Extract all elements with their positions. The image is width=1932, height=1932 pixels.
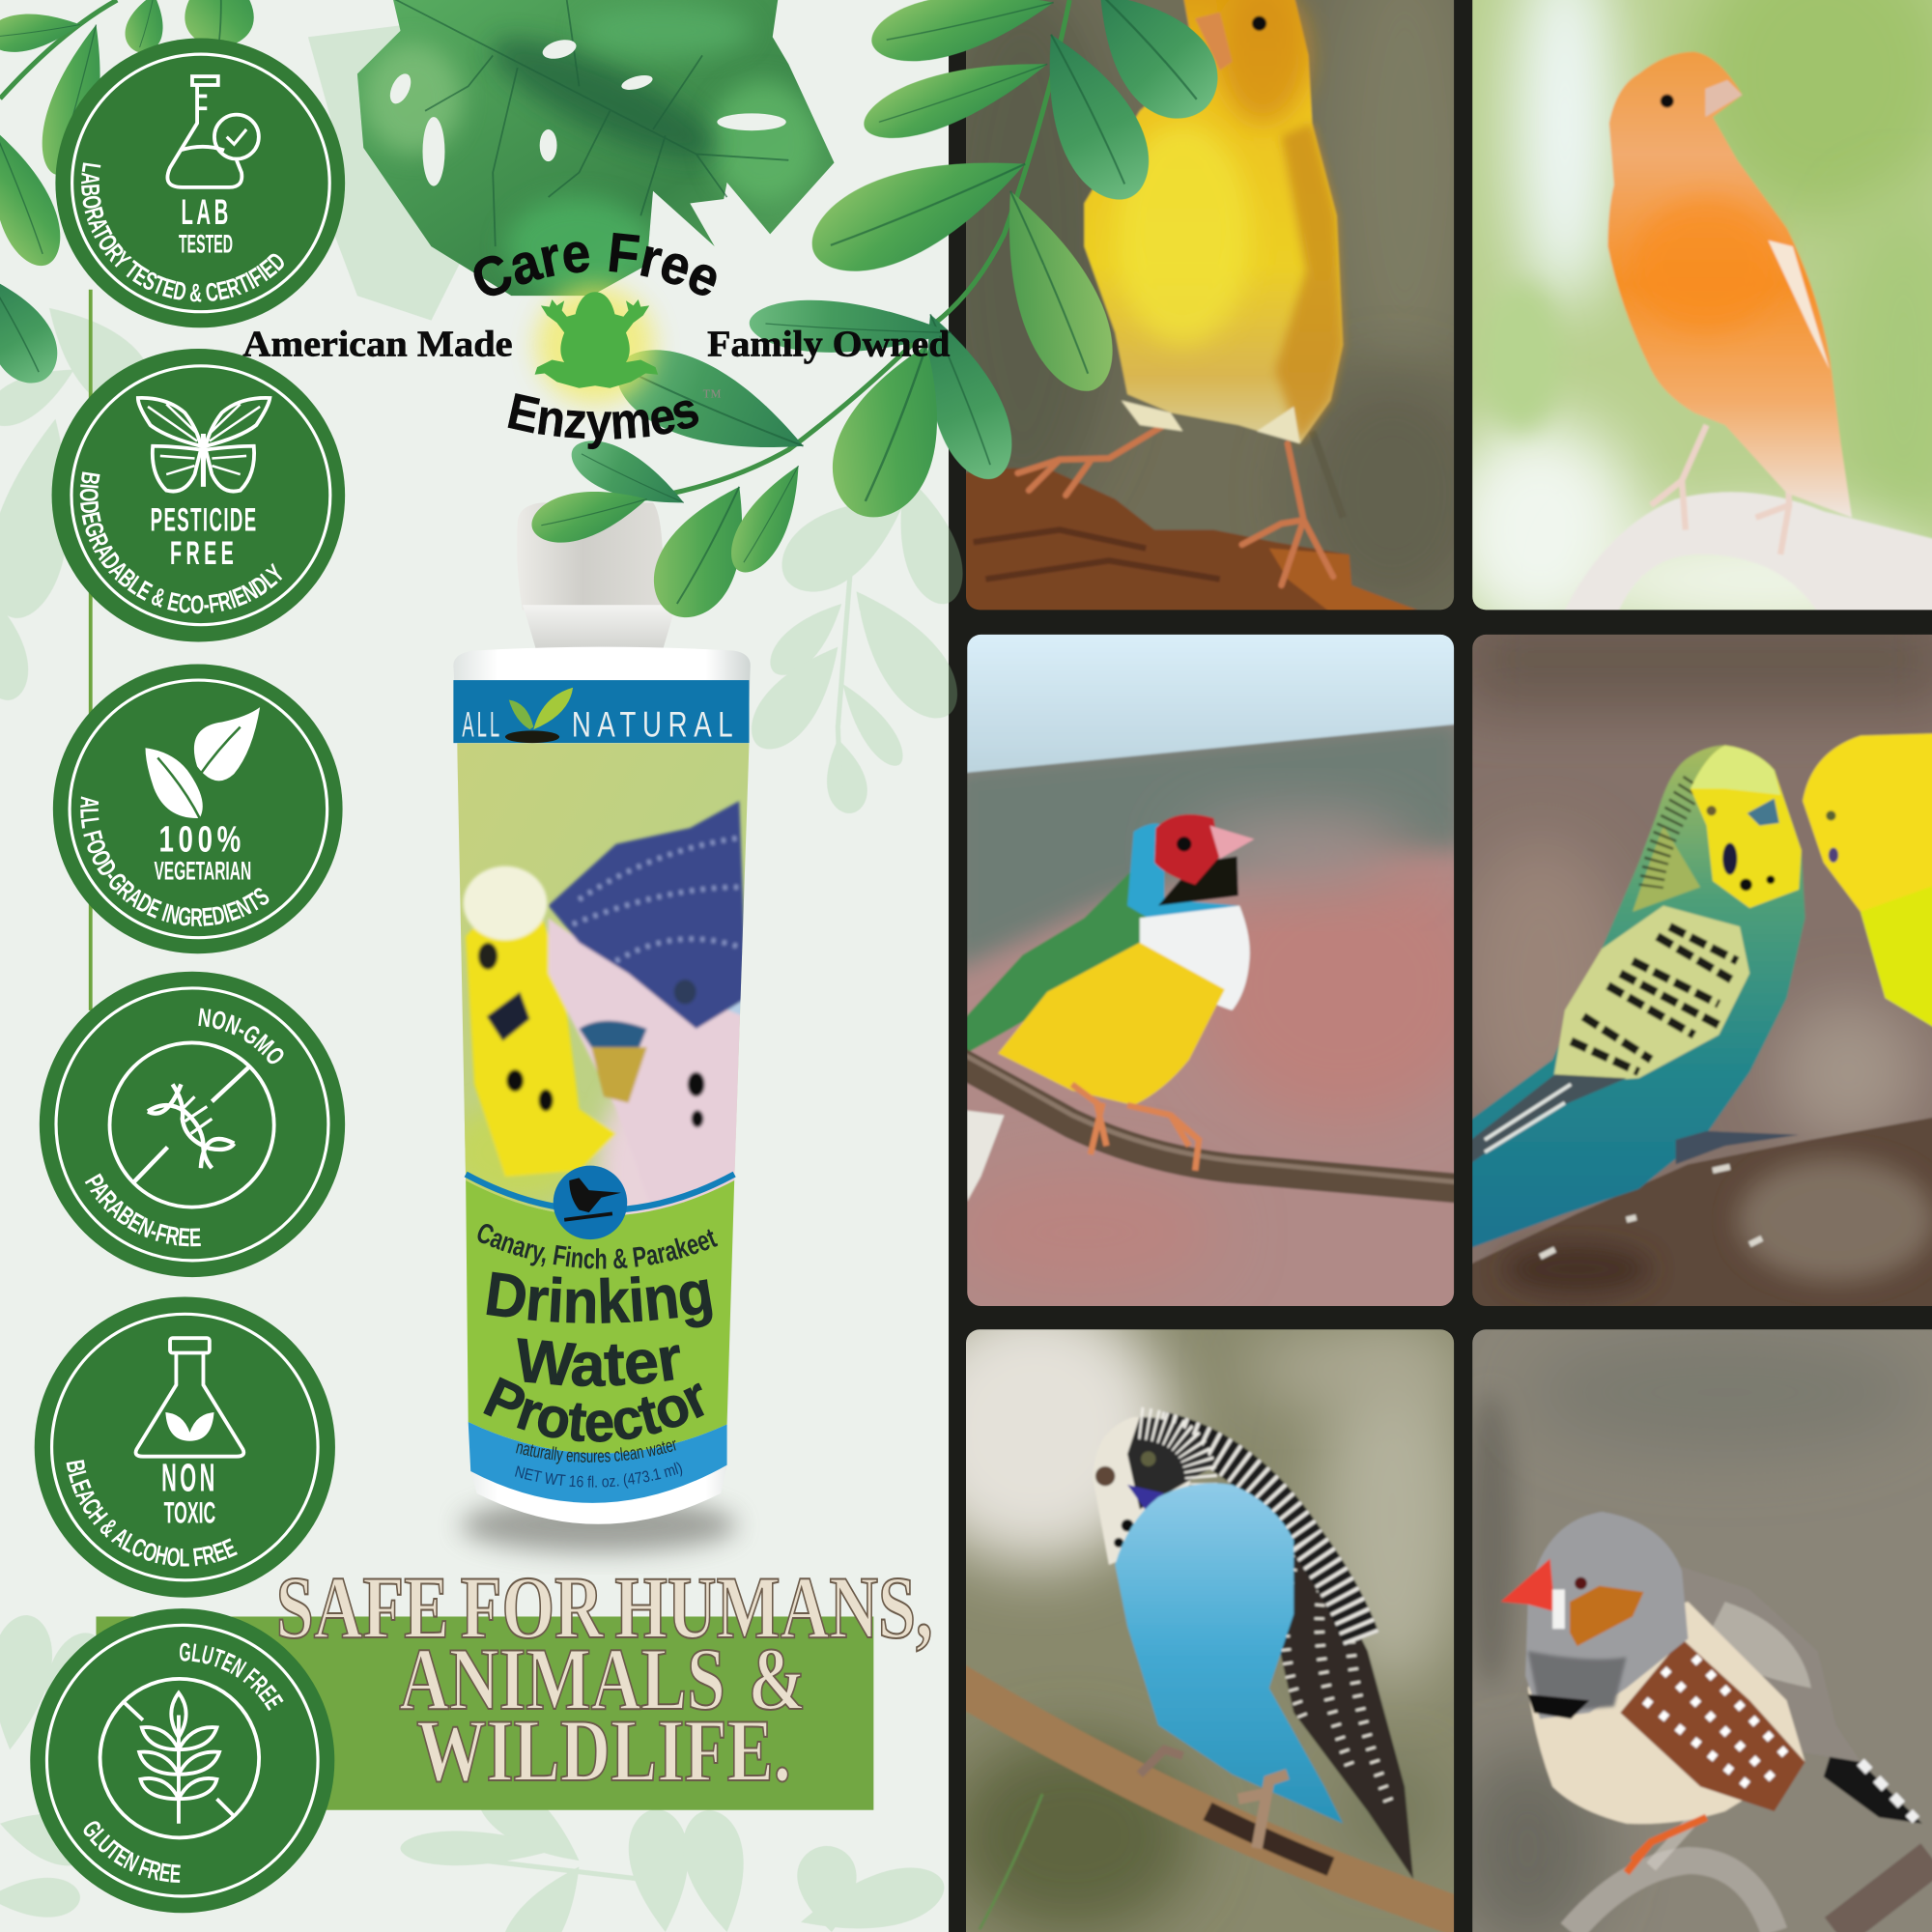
badge: pesticide free: PESTICIDE bbox=[151, 502, 258, 539]
photo: budgerigars bbox=[1454, 610, 1932, 1319]
badge: non toxic: NON bbox=[161, 1455, 218, 1499]
frog bbox=[535, 292, 658, 388]
headline: SAFE FOR HUMANS, bbox=[276, 1558, 933, 1657]
logo bbox=[473, 232, 722, 450]
label text: naturally ensures clean water bbox=[516, 1439, 676, 1464]
all natural: ALL bbox=[462, 705, 502, 745]
pale background leaves bbox=[0, 25, 974, 1932]
photo: orange canary bbox=[1472, 0, 1932, 611]
badge: non-gmo bbox=[40, 972, 345, 1277]
photo: gouldian finch bbox=[967, 634, 1455, 1306]
badge: lab tested: LAB bbox=[182, 192, 232, 232]
background panel bbox=[0, 0, 949, 1932]
label text: Drinking bbox=[487, 1271, 713, 1327]
label text: Canary, Finch & Parakeet bbox=[477, 1224, 719, 1269]
headline: WILDLIFE. bbox=[416, 1701, 791, 1800]
green banner bbox=[96, 1616, 873, 1810]
sprout icon bbox=[505, 688, 573, 743]
bottle body bbox=[453, 647, 751, 1524]
label text: Water bbox=[517, 1338, 680, 1387]
icon: flask with sprout bbox=[136, 1338, 243, 1457]
vertical green line bbox=[89, 290, 93, 1010]
icon: crossed dna bbox=[134, 1067, 248, 1181]
badge: non-gmo: NON-GMO bbox=[198, 1009, 284, 1065]
all natural bbox=[462, 705, 739, 745]
icon: crossed wheat bbox=[124, 1693, 234, 1824]
badge: lab tested bbox=[55, 39, 345, 327]
badge: non toxic: TOXIC bbox=[164, 1495, 215, 1530]
badge: non toxic bbox=[35, 1296, 335, 1598]
badge: pesticide free bbox=[52, 349, 345, 642]
badge: pesticide free: BIODEGRADABLE & ECO-FRIENDLY bbox=[79, 471, 282, 614]
trademark: ™ bbox=[702, 386, 722, 408]
badge: non-gmo: PARABEN-FREE bbox=[85, 1173, 201, 1246]
logo glow bbox=[536, 286, 654, 404]
badge: lab tested: LABORATORY TESTED & CERTIFIED bbox=[81, 162, 284, 301]
all natural: NATURAL bbox=[572, 705, 739, 745]
badge: pesticide free: FREE bbox=[170, 535, 238, 572]
cap bbox=[517, 502, 664, 610]
badge: vegetarian: ALL FOOD-GRADE INGREDIENTS bbox=[80, 796, 269, 926]
badge: vegetarian: VEGETARIAN bbox=[154, 857, 251, 886]
label art bbox=[457, 743, 750, 1215]
icon: butterfly bbox=[138, 398, 270, 492]
dark gallery backing bbox=[949, 0, 1932, 1932]
bottle shadow bbox=[461, 1498, 737, 1552]
label text bbox=[477, 1224, 719, 1489]
bird roundel bbox=[554, 1166, 627, 1239]
badge: gluten free bbox=[30, 1608, 334, 1913]
text: Family Owned: Family Owned bbox=[707, 325, 950, 365]
label text: NET WT 16 fl. oz. (473.1 ml) bbox=[515, 1463, 682, 1489]
badge: gluten free: GLUTEN FREE bbox=[180, 1642, 284, 1711]
headline: ANIMALS & bbox=[399, 1630, 806, 1728]
icon: flask bbox=[167, 76, 259, 187]
logo bottom text: Enzymes bbox=[508, 393, 699, 450]
photo: zebra finch bbox=[1454, 1318, 1932, 1932]
badge: vegetarian bbox=[53, 665, 343, 953]
label text: Protector bbox=[483, 1377, 704, 1442]
text: American Made: American Made bbox=[242, 325, 513, 365]
icon: leaves bbox=[146, 707, 260, 818]
photo: blue budgerigar bbox=[966, 1329, 1455, 1932]
logo top text: Care Free bbox=[473, 232, 717, 296]
lower green label bbox=[466, 1180, 734, 1453]
foreground leaves bbox=[0, 0, 1237, 632]
badge: gluten free: GLUTEN FREE bbox=[83, 1821, 181, 1883]
badge: non toxic: BLEACH & ALCOHOL FREE bbox=[66, 1460, 238, 1567]
badge: vegetarian: 100% bbox=[159, 818, 245, 860]
headline bbox=[276, 1558, 933, 1800]
product bottle bbox=[450, 502, 751, 1569]
blue top band bbox=[453, 680, 750, 743]
monstera leaf bbox=[357, 0, 835, 296]
badge: lab tested: TESTED bbox=[179, 229, 233, 258]
photo: yellow canary bbox=[966, 0, 1455, 611]
